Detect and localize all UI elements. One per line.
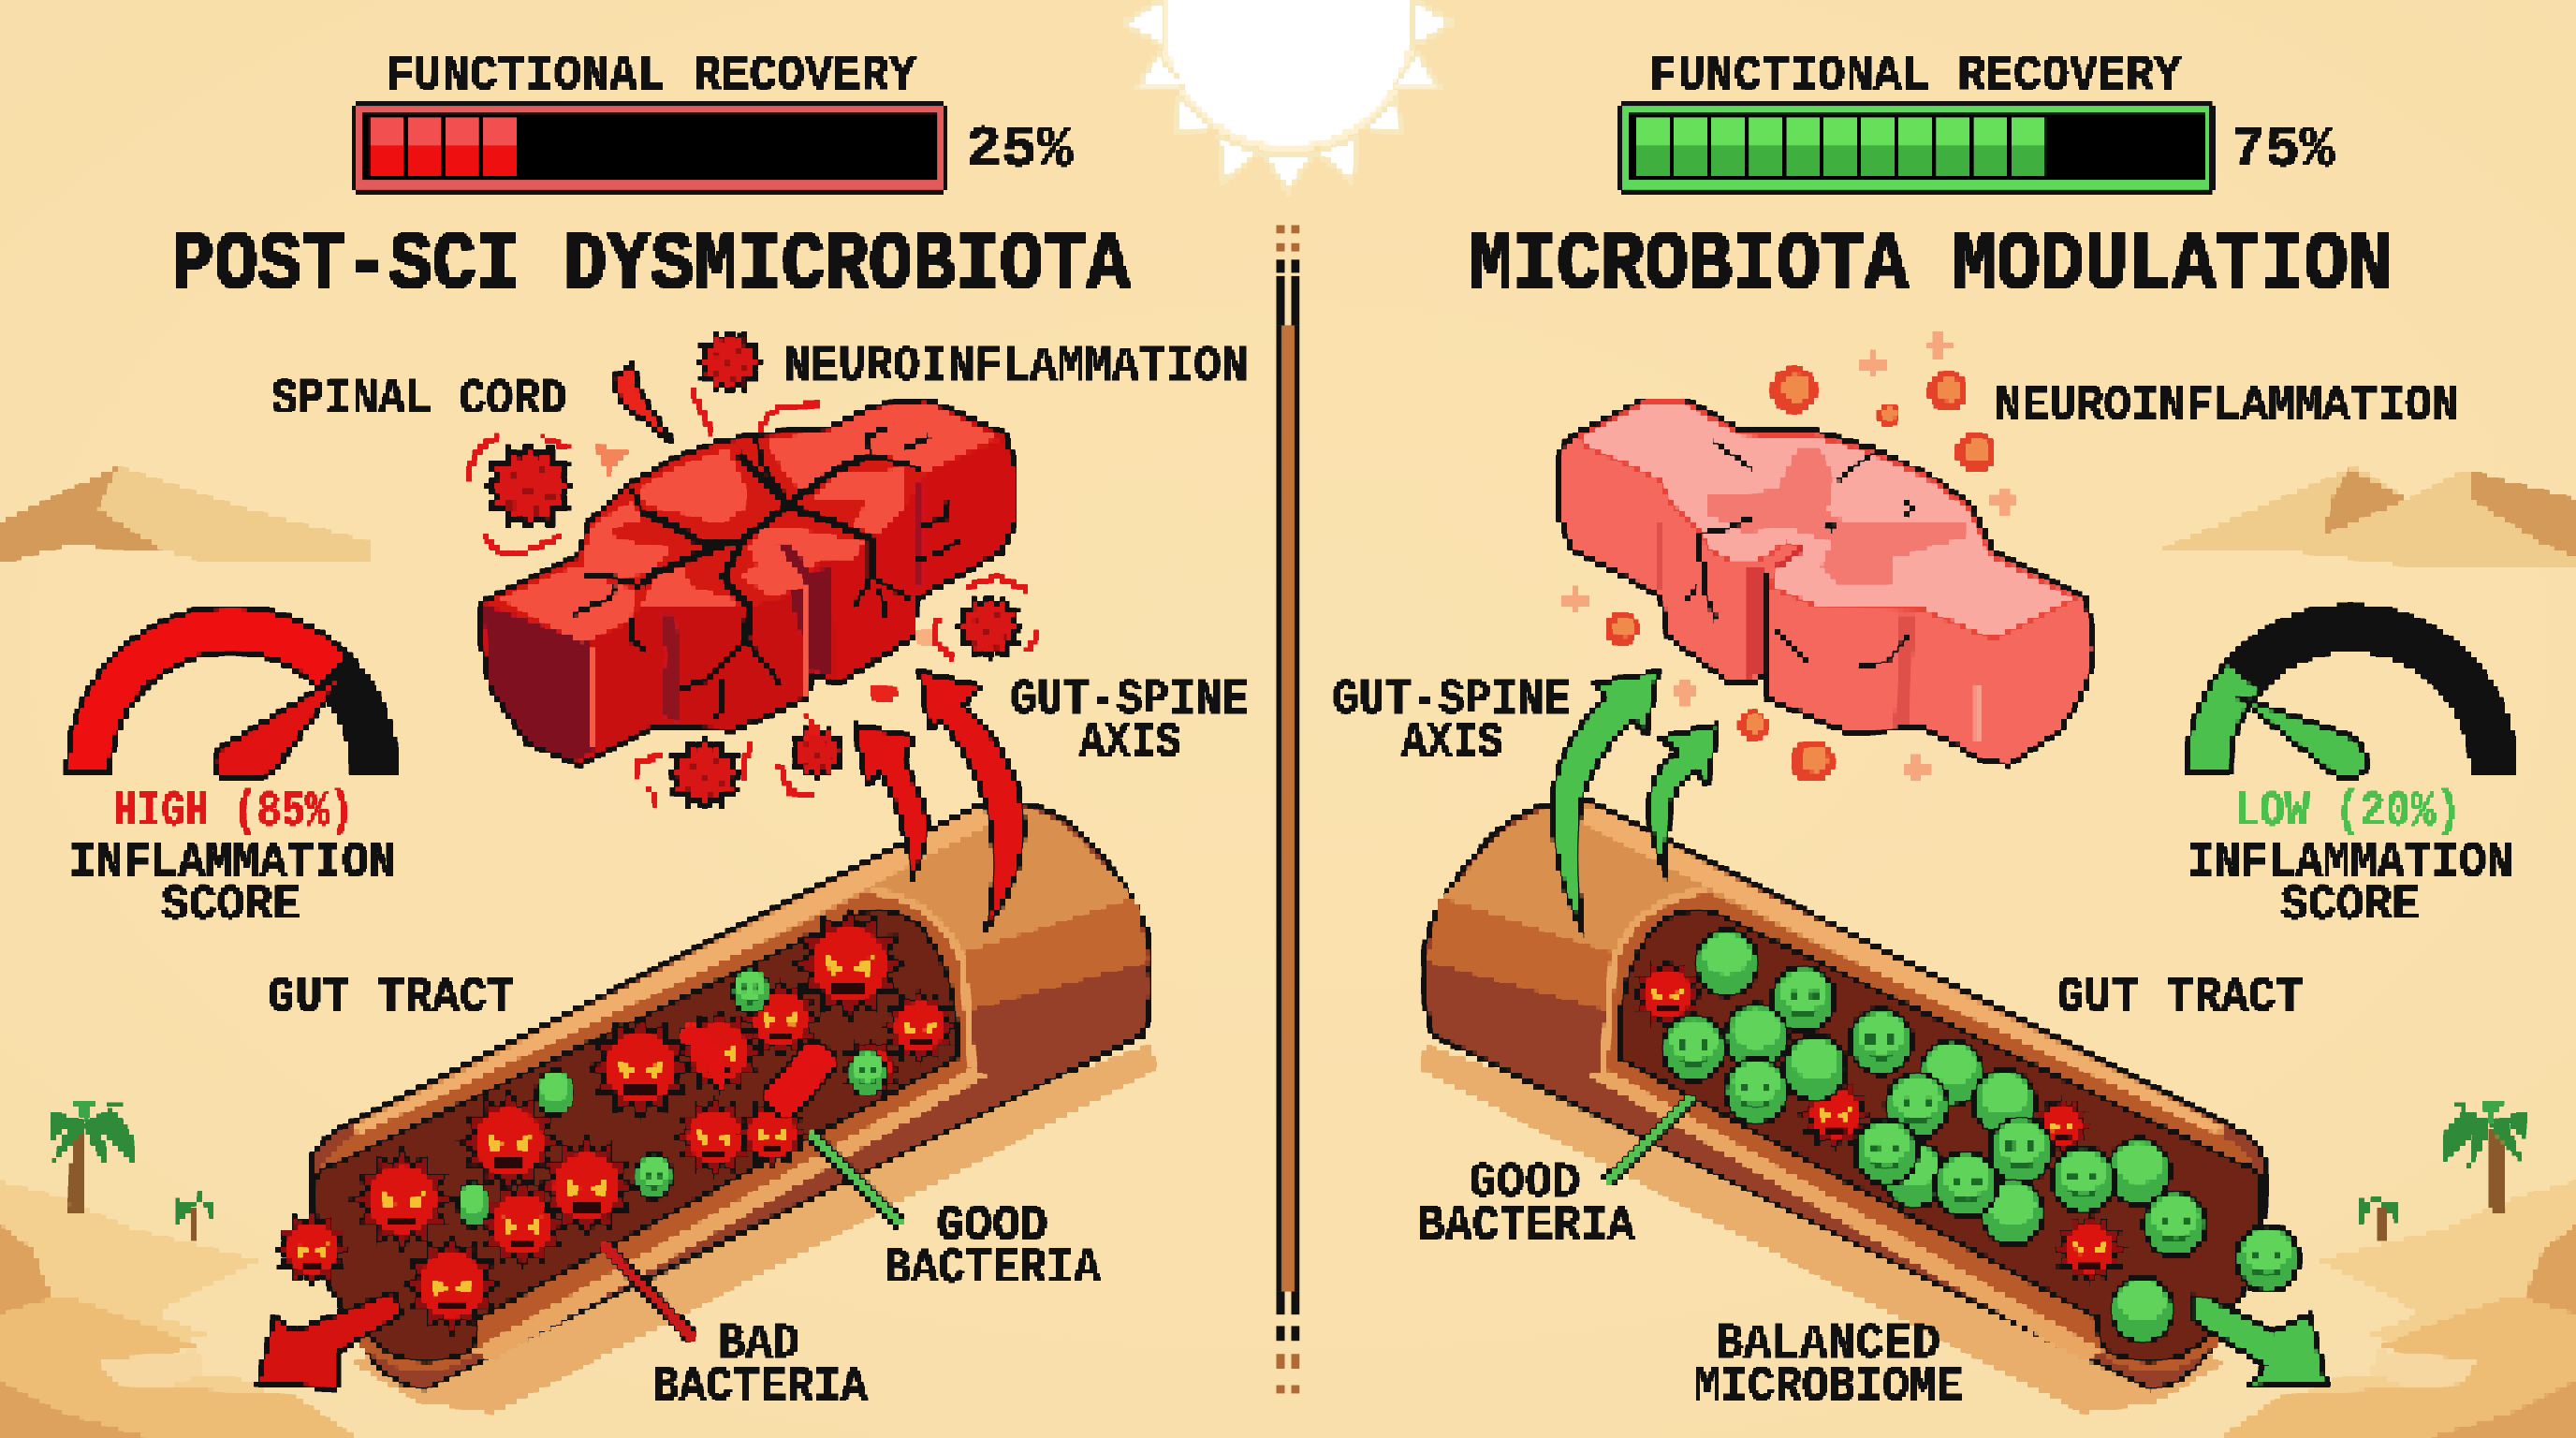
recovery bar: 75% — [1618, 102, 2215, 196]
label: balanced microbiome: MICROBIOME — [1694, 1358, 1963, 1415]
panel: post-SCI dysmicrobiota — [67, 48, 1249, 1415]
arrow: gut-spine axis, outer — [1553, 672, 1658, 935]
label: inflammation score — [2187, 834, 2513, 933]
gut tract: balanced — [1419, 801, 2264, 1413]
label: good bacteria: BACTERIA — [884, 1240, 1101, 1297]
arrow: gut-spine axis, inner — [1649, 725, 1719, 877]
label: functional recovery: FUNCTIONAL RECOVERY — [1649, 48, 2182, 104]
label: good bacteria — [1418, 1155, 1635, 1254]
reduced inflammation particles — [1562, 332, 2017, 783]
sand dunes: lower right corner — [2217, 1181, 2576, 1438]
label: gut-spine axis — [1332, 672, 1571, 770]
dunes: upper right — [2159, 466, 2576, 568]
arrow: gut-spine axis, outer — [920, 672, 1024, 930]
label: inflammation score: SCORE — [2280, 877, 2420, 933]
gauge: high inflammation — [67, 607, 396, 779]
gauge readout: high 85%: HIGH (85%) — [113, 784, 353, 840]
label: gut-spine axis: GUT-SPINE — [1332, 672, 1571, 728]
label: balanced microbiome: BALANCED — [1715, 1316, 1940, 1372]
sand dunes: lower left corner — [0, 1181, 359, 1438]
pointer: good bacteria — [1606, 1097, 1692, 1183]
label: good bacteria: BACTERIA — [1418, 1197, 1635, 1254]
good bacteria, sparse — [458, 968, 886, 1227]
value: 75%: 75% — [2231, 116, 2334, 183]
arrow: gut-spine axis, inner — [855, 725, 927, 879]
right illustrations — [1419, 332, 2515, 1413]
label: gut tract: GUT TRACT — [2056, 969, 2304, 1025]
dune: upper left — [0, 466, 370, 564]
spinal cord: healing — [1558, 399, 2094, 765]
label: functional recovery: FUNCTIONAL RECOVERY — [386, 48, 917, 104]
gut tract: dysbiotic — [312, 801, 1157, 1413]
recovery bar: 25% — [352, 102, 948, 196]
centre divider — [1277, 225, 1299, 1393]
label: good bacteria: GOOD — [936, 1197, 1048, 1254]
left illustrations — [67, 331, 1157, 1413]
label: good bacteria — [884, 1197, 1101, 1297]
label: balanced microbiome — [1694, 1316, 1963, 1415]
palm trees: right — [2361, 1101, 2526, 1239]
left text and recovery bar — [69, 48, 1249, 1415]
label: inflammation score: INFLAMMATION — [2187, 834, 2513, 890]
gauge: low inflammation — [2187, 607, 2515, 778]
pointer: good bacteria — [810, 1134, 900, 1225]
label: bad bacteria — [652, 1316, 868, 1415]
sun — [1123, 0, 1453, 191]
panel: microbiota modulation — [1332, 48, 2515, 1415]
label: spinal cord: SPINAL CORD — [271, 372, 567, 428]
label: inflammation score: SCORE — [161, 877, 300, 933]
palm trees: left — [50, 1101, 215, 1239]
arrow: flow out of gut — [2191, 1297, 2326, 1387]
label: good bacteria: GOOD — [1469, 1155, 1580, 1211]
label: neuroinflammation: NEUROINFLAMMATION — [783, 338, 1249, 394]
label: inflammation score: INFLAMMATION — [69, 834, 396, 890]
pointer: bad bacteria — [603, 1244, 694, 1339]
label: gut-spine axis: AXIS — [1401, 714, 1503, 770]
gauge readout: low 20%: LOW (20%) — [2234, 784, 2461, 840]
neuroinflammation particles — [468, 331, 1038, 808]
spinal cord: inflamed and cracked — [479, 399, 1016, 765]
label: gut-spine axis: GUT-SPINE — [1010, 672, 1249, 728]
right text and recovery bar — [1332, 48, 2513, 1415]
label: gut-spine axis: AXIS — [1079, 714, 1181, 770]
label: gut tract: GUT TRACT — [268, 969, 514, 1025]
label: neuroinflammation: NEUROINFLAMMATION — [1995, 378, 2459, 434]
label: gut-spine axis — [1010, 672, 1249, 770]
good bacteria, abundant — [1662, 930, 2298, 1343]
bad bacteria, few — [1632, 959, 2125, 1284]
label: inflammation score — [69, 834, 396, 933]
arrow: loss out of gut — [258, 1292, 402, 1388]
bad bacteria cluster — [275, 909, 957, 1333]
label: bad bacteria: BAD — [718, 1316, 800, 1372]
heading: post-SCI dysmicrobiota: POST-SCI DYSMICROBIOTA — [171, 220, 1131, 313]
value: 25%: 25% — [966, 116, 1073, 183]
label: bad bacteria: BACTERIA — [652, 1358, 868, 1415]
heading: microbiota modulation: MICROBIOTA MODULATION — [1469, 220, 2392, 313]
